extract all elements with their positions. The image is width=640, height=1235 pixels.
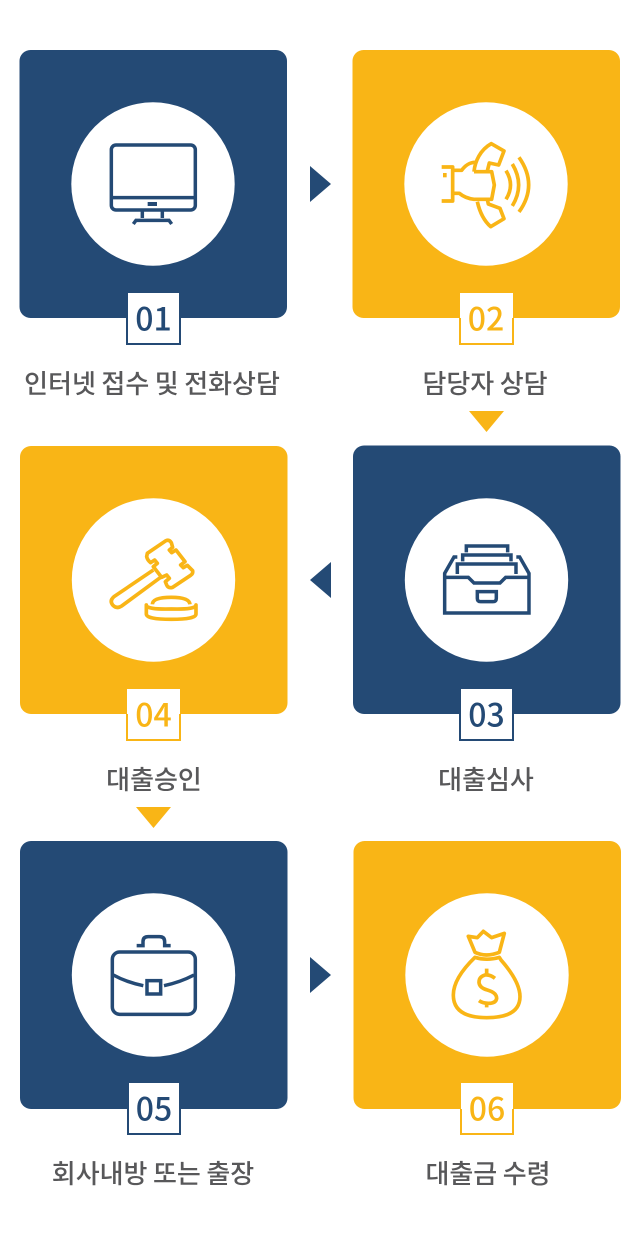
panel: step 05 [20, 841, 288, 1189]
panel: step 06 [354, 841, 621, 1189]
number badge 03: 03 [468, 690, 505, 736]
icon: computer monitor [111, 145, 195, 224]
icon: phone in hand [442, 144, 529, 227]
number badge 01 [127, 293, 180, 344]
panel: step 04 [20, 446, 288, 795]
white circle 04 [72, 498, 235, 662]
white circle 02 [404, 102, 568, 266]
number badge 02 [460, 293, 513, 344]
number badge 03 [460, 689, 513, 740]
arrow: down 2 to 3 [469, 411, 504, 432]
white circle 06 [405, 893, 569, 1057]
number badge 04 [127, 689, 180, 740]
step label 03: 대출심사 [438, 765, 534, 795]
number badge 05 [128, 1083, 180, 1134]
white circle 05 [72, 893, 235, 1057]
number badge 04: 04 [135, 690, 172, 736]
step label 05: 회사내방 또는 출장 [52, 1159, 254, 1189]
card background 01 [20, 50, 287, 318]
icon: gavel [111, 540, 196, 619]
number badge 06: 06 [469, 1084, 505, 1130]
card background 06 [354, 841, 621, 1109]
number badge 05: 05 [136, 1084, 172, 1130]
icon: money bag [453, 931, 520, 1018]
arrow: down 4 to 5 [136, 807, 171, 828]
icon: file drawer [445, 546, 529, 613]
arrow: right 1 to 2 [310, 166, 331, 202]
arrow: left 3 to 4 [310, 562, 331, 598]
white circle 03 [405, 498, 568, 662]
step label 06: 대출금 수령 [425, 1159, 551, 1189]
step label 01: 인터넷 접수 및 전화상담 [24, 369, 280, 399]
number badge 06 [461, 1083, 513, 1134]
white circle 01 [71, 102, 235, 266]
card background 03 [353, 446, 620, 714]
number badge 02: 02 [468, 294, 504, 340]
card background 05 [20, 841, 288, 1109]
step label 02: 담당자 상담 [422, 369, 548, 399]
card background 02 [352, 50, 620, 318]
panel: step 03 [353, 446, 620, 795]
icon: briefcase [112, 937, 195, 1014]
card background 04 [20, 446, 288, 714]
step label 04: 대출승인 [106, 765, 202, 795]
panel: step 02 [352, 50, 620, 399]
number badge 01: 01 [135, 294, 172, 340]
panel: step 01 [20, 50, 287, 399]
arrow: right 5 to 6 [310, 957, 331, 993]
